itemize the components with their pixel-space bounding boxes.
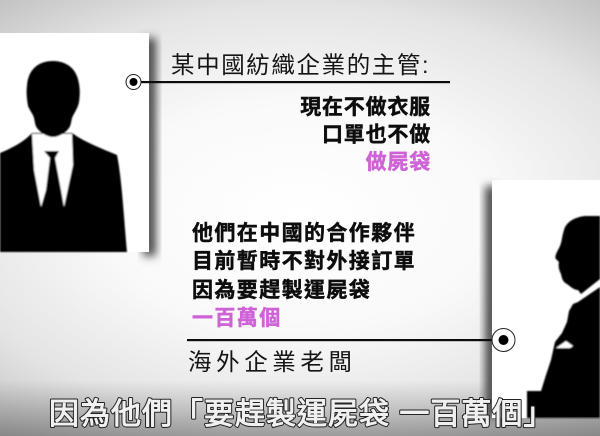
icon: profile man silhouette [527, 216, 600, 418]
panel: left portrait [0, 33, 156, 256]
text block: overseas boss quote [192, 222, 416, 330]
subtitle caption: 因為他們「要趕製運屍袋 一百萬個」 [49, 398, 554, 431]
callout: left marker and rule [126, 74, 450, 90]
text block: executive quote [300, 95, 431, 174]
text block: executive quote: 現在不做衣服 [300, 95, 431, 119]
icon: suited man silhouette [0, 61, 127, 252]
heading: Chinese textile executive: 某中國紡織企業的主管: [171, 52, 430, 78]
text block: executive quote: 做屍袋 [366, 151, 431, 174]
text block: overseas boss quote: 一百萬個 [192, 307, 282, 330]
panel: right portrait [485, 180, 600, 418]
text block: overseas boss quote: 因為要趕製運屍袋 [192, 279, 371, 302]
subtitle caption: 因為他們「要趕製運屍袋 一百萬個」 [49, 398, 554, 431]
text block: overseas boss quote: 他們在中國的合作夥伴 [192, 222, 416, 245]
text block: executive quote: 口單也不做 [322, 124, 431, 146]
callout: right marker and rule [187, 328, 515, 352]
heading: overseas business owner: 海外企業老闆 [188, 349, 357, 375]
text block: overseas boss quote: 目前暫時不對外接訂單 [192, 250, 416, 273]
